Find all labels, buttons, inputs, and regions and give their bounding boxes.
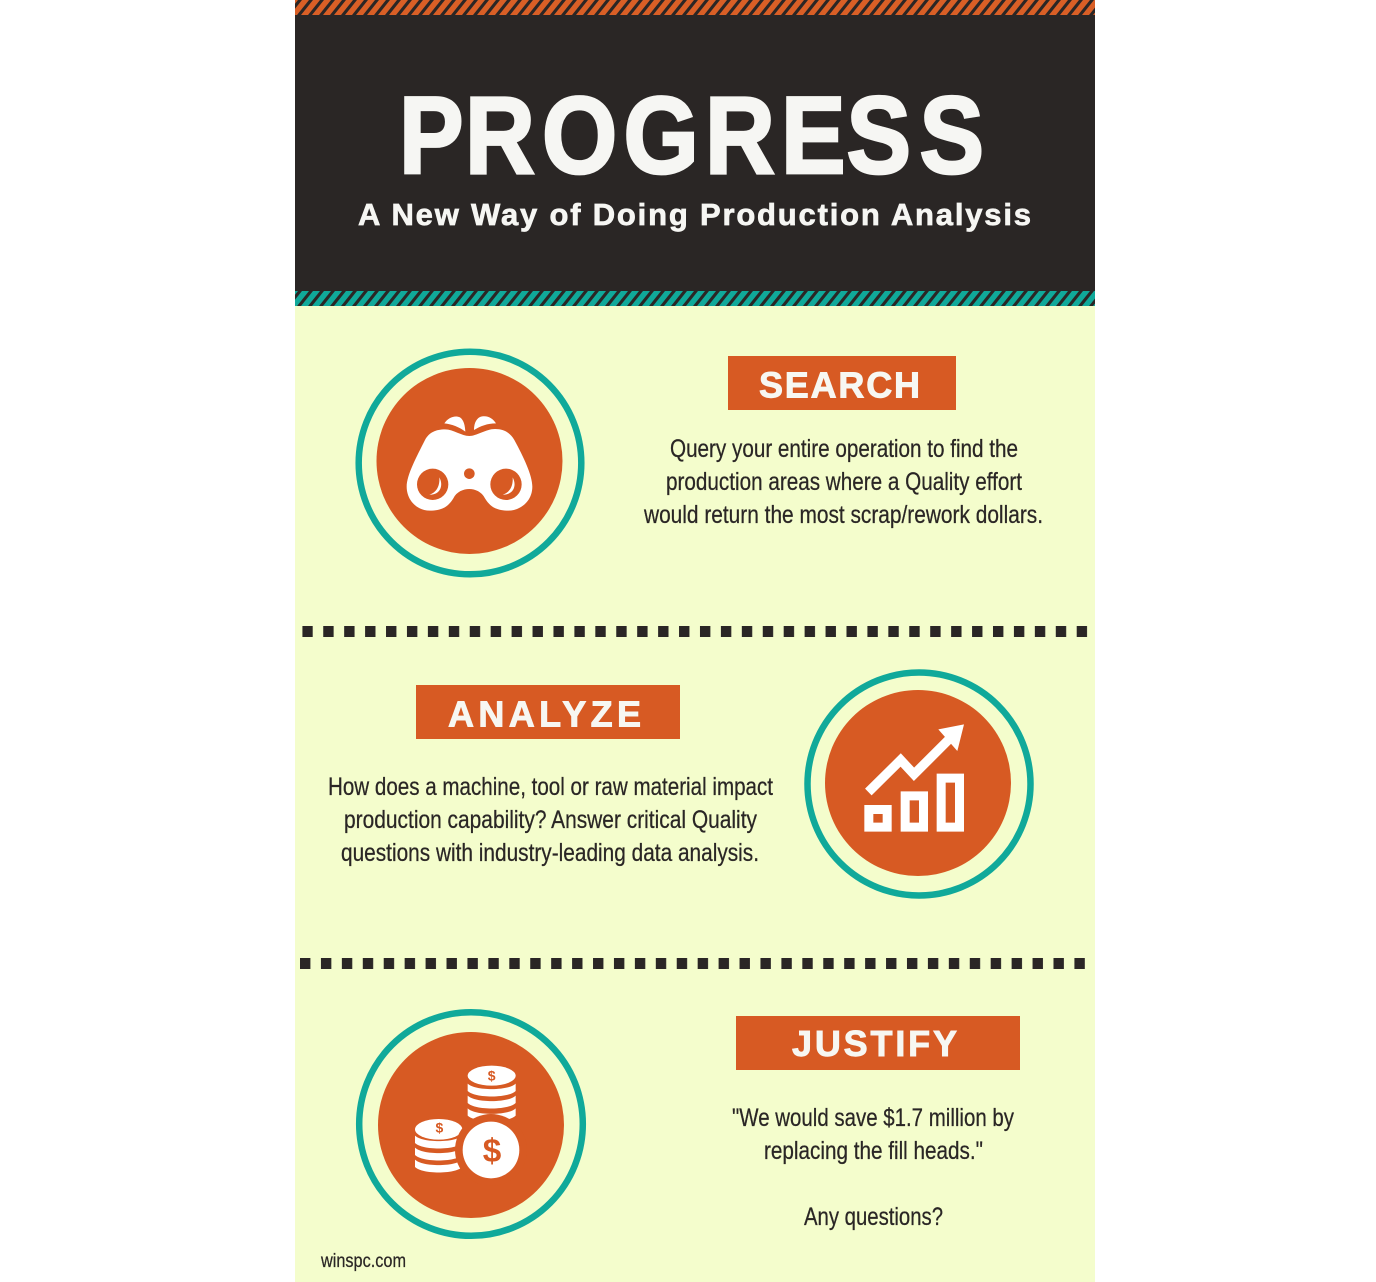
text: analyze description [328,773,773,867]
text: justify quote: replacing the fill heads." [764,1137,983,1165]
teal striped band [295,291,1095,306]
page background panel [295,0,1095,1282]
panel: analyze [328,672,1030,896]
text: search description: would return the most scrap/rework dollars. [643,501,1043,529]
text: justify quote [732,1104,1014,1231]
text: justify quote: "We would save $1.7 million by [732,1104,1014,1132]
subtitle: A New Way of Doing Production Analysis [358,197,1031,232]
text: search description [643,435,1043,529]
icon: rising chart in circle [808,672,1030,896]
icon: coins in circle [359,1012,583,1236]
text: analyze description: How does a machine, tool or raw material impact [328,773,773,801]
icon: binoculars in circle [359,352,581,574]
title: PROGRESS [399,73,984,196]
text: search description: Query your entire operation to find the [670,435,1018,463]
heading: search: SEARCH [759,364,920,406]
icon: coins in circle: $ [483,1133,502,1170]
heading: search [728,356,956,410]
icon: coins in circle: $ [488,1067,496,1083]
text: justify quote: Any questions? [804,1203,943,1231]
heading: justify: JUSTIFY [792,1023,957,1064]
text: search description: production areas where a Quality effort [666,468,1022,496]
source credit: winspc.com [320,1251,406,1272]
panel: search [359,352,1043,574]
text: analyze description: questions with industry-leading data analysis. [341,839,759,867]
orange striped band [295,0,1095,15]
heading: justify [736,1016,1020,1070]
header banner [295,0,1095,306]
heading: analyze: ANALYZE [448,694,641,734]
panel: justify [359,1012,1020,1236]
icon: coins in circle: $ [435,1119,443,1135]
text: analyze description: production capability? Answer critical Quality [344,806,757,834]
heading: analyze [416,685,680,739]
